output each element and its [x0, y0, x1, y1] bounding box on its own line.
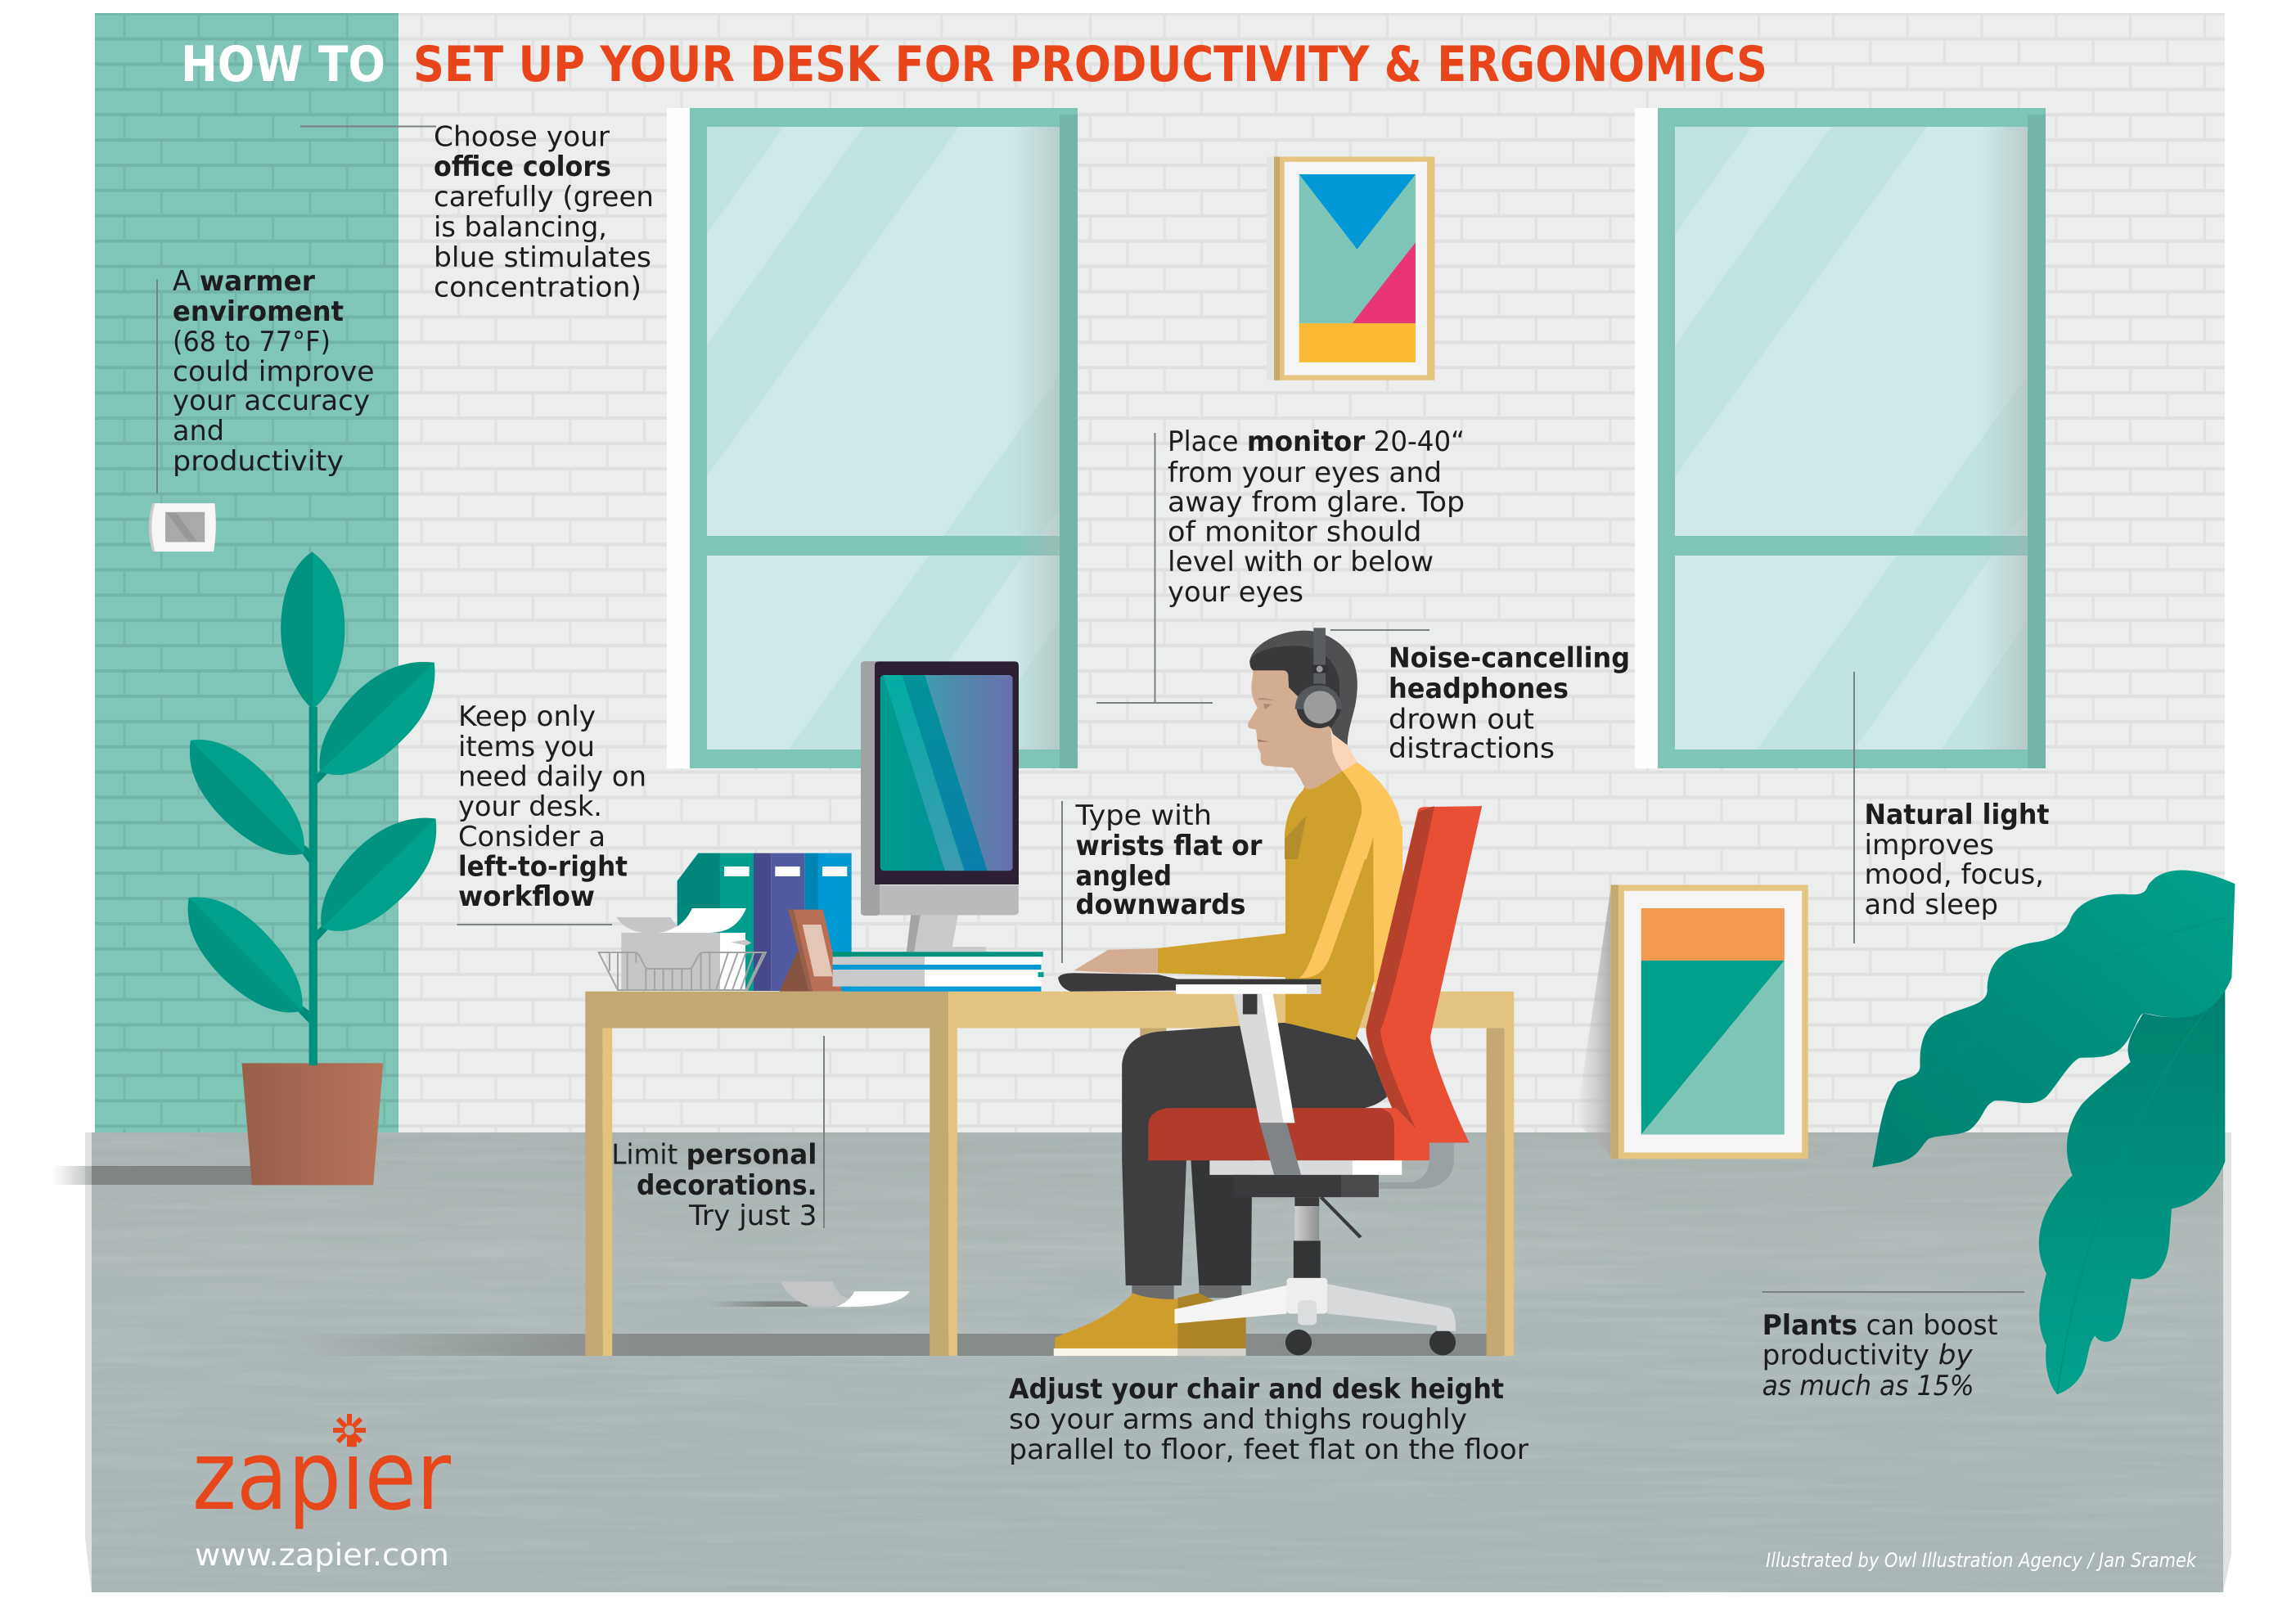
thermostat: [149, 503, 216, 551]
text: natural light: Natural light: [1864, 799, 2049, 831]
window: right: [1635, 108, 2046, 768]
pot shadow: [52, 1166, 255, 1185]
wall: teal painted section: [95, 13, 398, 1134]
text: monitor placement: away from glare. Top: [1168, 486, 1465, 519]
title: SET UP YOUR DESK FOR PRODUCTIVITY & ERGONOMICS: [413, 36, 1767, 93]
person: boots: [1054, 1293, 1246, 1356]
text: chair and desk height: so your arms and thighs roughly: [1009, 1403, 1467, 1436]
text: chair and desk height: Adjust your chair and desk height: [1009, 1373, 1504, 1406]
desk shadow: [270, 1334, 1489, 1356]
text: warmer environment: productivity: [173, 445, 344, 478]
text: office colors: is balancing,: [434, 211, 607, 244]
text: typing posture: wrists flat or: [1075, 830, 1263, 862]
text: keep only daily items: need daily on: [458, 761, 646, 794]
desk photo frame: [780, 910, 842, 992]
text: office colors: blue stimulates: [434, 241, 651, 274]
text: keep only daily items: workflow: [458, 880, 595, 913]
text: office colors: Choose your: [434, 121, 610, 154]
binders: [678, 853, 852, 991]
paper tray: [599, 908, 766, 991]
leader lines: [157, 126, 2024, 1292]
text: keep only daily items: left-to-right: [458, 851, 628, 884]
desk with items, person and chair: [585, 628, 1514, 1356]
text: warmer environment: your accuracy: [173, 385, 370, 417]
text: noise-cancelling headphones: drown out: [1389, 704, 1534, 736]
text: plants boost productivity: Plants can boost: [1763, 1309, 1998, 1342]
window: left: [667, 108, 1078, 768]
text: plants boost productivity: [1763, 1309, 1998, 1402]
illustration credit: Illustrated by Owl Illustration Agency / Jan Sramek: [1766, 1549, 2197, 1572]
text: monitor placement: of monitor should: [1168, 516, 1422, 549]
website url: www.zapier.com: [195, 1537, 449, 1573]
plant: potted rubber plant: [188, 551, 436, 1185]
text: chair and desk height: parallel to floor, feet flat on the floor: [1009, 1434, 1528, 1466]
text: natural light: mood, focus,: [1864, 858, 2044, 891]
text: warmer environment: (68 to 77°F): [173, 326, 331, 358]
text: keep only daily items: your desk.: [458, 790, 602, 823]
text: office colors: office colors: [434, 151, 611, 183]
text: natural light: and sleep: [1864, 889, 1998, 921]
desk: [585, 992, 1514, 1356]
text: warmer environment: could improve: [173, 355, 375, 388]
text: monitor placement: Place monitor 20-40“: [1168, 425, 1465, 458]
zapier logo: zapier: [192, 1420, 452, 1532]
text: office colors: [434, 121, 654, 304]
text: typing posture: downwards: [1075, 889, 1245, 921]
text: plants boost productivity: productivity by: [1763, 1339, 1973, 1371]
text: typing posture: Type with: [1074, 799, 1212, 832]
floor: [85, 1132, 2231, 1592]
text: keep only daily items: Keep only: [458, 700, 596, 733]
text: keep only daily items: items you: [458, 731, 595, 763]
text: warmer environment: enviroment: [173, 295, 344, 328]
person: legs: [1122, 1023, 1387, 1300]
text: warmer environment: [173, 265, 375, 478]
text: monitor placement: from your eyes and: [1168, 457, 1442, 489]
person: head with headphones and shoulders: [1248, 628, 1402, 859]
text: natural light: [1864, 799, 2049, 921]
text: noise-cancelling headphones: [1389, 641, 1630, 765]
chair: [1148, 806, 1482, 1355]
books under monitor: [833, 952, 1044, 992]
person: hand and keyboard: [1058, 948, 1177, 992]
dropped paper on floor: [708, 1281, 910, 1307]
text: monitor placement: [1168, 425, 1465, 609]
text: noise-cancelling headphones: distractions: [1389, 732, 1555, 765]
plant: large leaves at right: [1872, 870, 2235, 1394]
title: HOW TO: [181, 36, 385, 93]
text: personal decorations: Limit personal: [611, 1139, 817, 1172]
monitor: [861, 661, 1019, 952]
text: typing posture: [1074, 799, 1263, 921]
person: sweater: [1158, 770, 1402, 1040]
text: noise-cancelling headphones: Noise-cancelling: [1389, 641, 1630, 674]
text: monitor placement: your eyes: [1168, 576, 1303, 609]
text: monitor placement: level with or below: [1168, 546, 1434, 578]
text: keep only daily items: [458, 700, 646, 913]
text: personal decorations: Try just 3: [688, 1200, 817, 1232]
text: keep only daily items: Consider a: [458, 821, 606, 853]
text: personal decorations: decorations.: [637, 1169, 817, 1202]
text: chair and desk height: [1009, 1373, 1528, 1466]
text: warmer environment: and: [173, 415, 224, 448]
leaning poster: orange and teal art: [1576, 885, 1808, 1159]
text: typing posture: angled: [1075, 860, 1172, 893]
text: warmer environment: A warmer: [173, 265, 315, 298]
text: personal decorations: [611, 1139, 817, 1232]
text: office colors: concentration): [434, 272, 642, 304]
text: noise-cancelling headphones: headphones: [1389, 673, 1569, 705]
text: natural light: improves: [1864, 829, 1994, 862]
wall poster: blue pink yellow art: [1267, 157, 1435, 380]
wall: white brick: [95, 13, 2225, 1134]
text: office colors: carefully (green: [434, 181, 654, 214]
text: plants boost productivity: as much as 15%: [1763, 1370, 1974, 1402]
